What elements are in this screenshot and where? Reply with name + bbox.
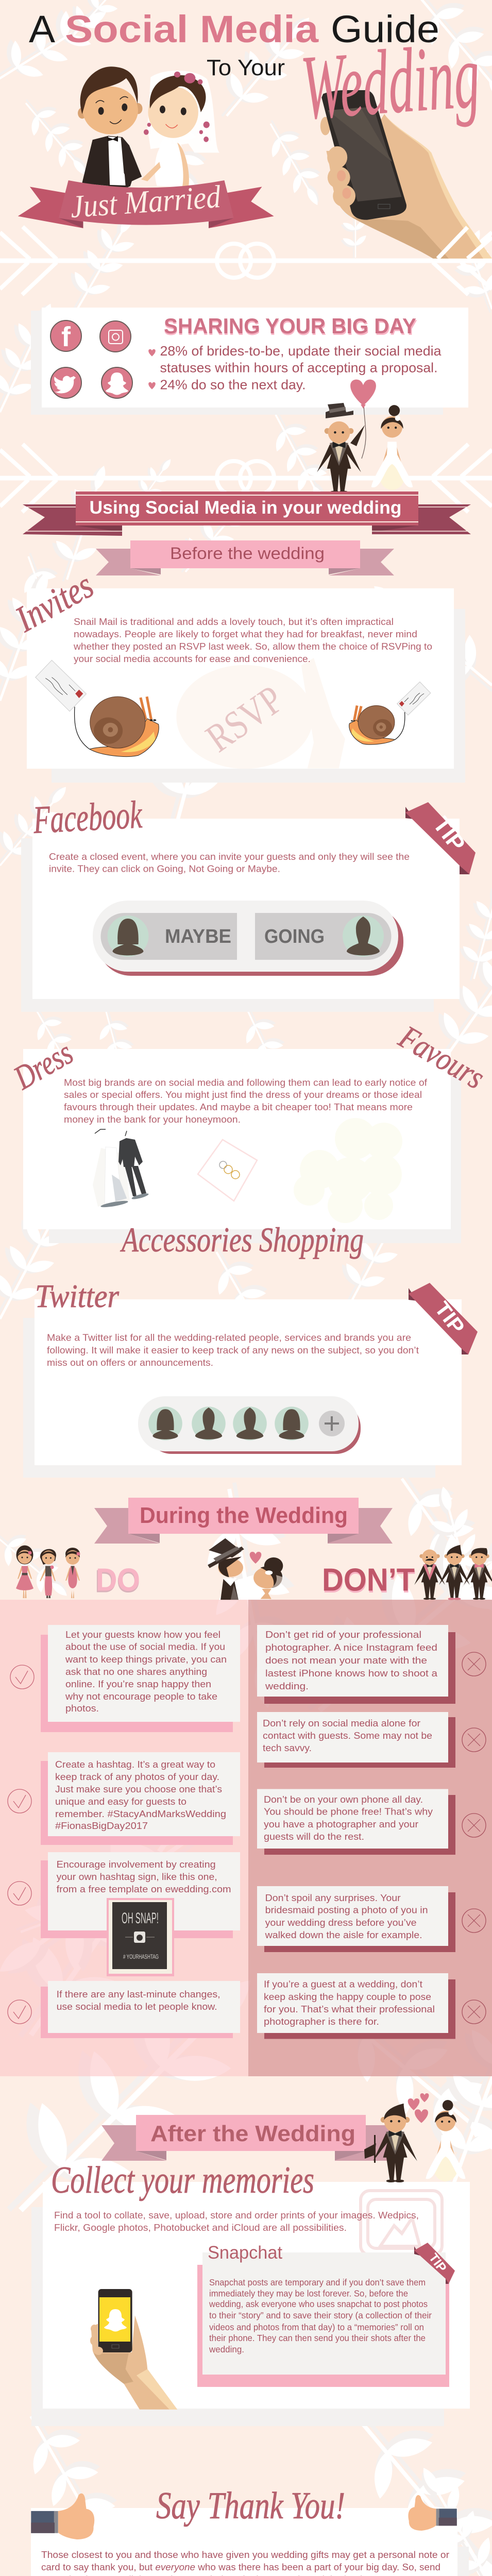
heading: Invites <box>8 564 100 640</box>
card: snapchat: immediately they may be lost forever. So, before the <box>209 2289 408 2299</box>
illustration: hand with snapchat phone <box>90 2289 177 2410</box>
title: Guide <box>331 8 439 50</box>
card: photographer: does not mean your mate with the <box>265 1655 427 1666</box>
text block: Most big brands are on social media and following them can lead to early notice of <box>64 1077 428 1088</box>
card: hashtag sign <box>8 1852 240 1976</box>
card: last-minute changes: If there are any last-minute changes, <box>57 1989 220 1999</box>
illustration: couple walking <box>364 2093 466 2182</box>
avatar: woman <box>107 916 148 957</box>
card: hashtag sign: from a free template on ewedding.com <box>57 1884 231 1894</box>
banner: after the wedding <box>101 2115 397 2161</box>
banner: before the wedding <box>96 540 394 575</box>
card: phone free: guests will do the rest. <box>264 1831 364 1842</box>
banner: using social media: Using Social Media in your wedding <box>90 498 402 518</box>
text block: money in the bank for your honeymoon. <box>64 1114 241 1125</box>
tip ribbon <box>414 2243 455 2284</box>
text block <box>73 616 432 664</box>
card: guests: why not encourage people to take <box>65 1691 217 1702</box>
illustration: kissing couple <box>208 1538 283 1600</box>
statistics list: statuses within hours of accepting a proposal. <box>160 360 438 375</box>
card: photographer <box>257 1625 486 1704</box>
card: hashtag: Just make sure you choose one that’s <box>55 1784 222 1794</box>
icon: facebook <box>50 320 81 352</box>
heading: SHARING YOUR BIG DAY <box>164 315 417 340</box>
panel: sharing your big day <box>31 308 468 415</box>
avatar list <box>138 1396 361 1454</box>
text block: your social media accounts for ease and convenience. <box>74 653 311 664</box>
card: phone free: You should be phone free! That’s why <box>264 1806 433 1817</box>
panel: do column <box>0 1600 248 2076</box>
card: guests: online. If you’re snap happy then <box>65 1679 211 1689</box>
text block <box>47 1332 419 1368</box>
card: tech savvy <box>257 1712 486 1768</box>
panel: facebook <box>21 793 476 1012</box>
heading: Facebook <box>32 793 143 842</box>
card: hashtag: remember. #StacyAndMarksWedding <box>55 1808 226 1819</box>
card: guests: Let your guests know how you feel <box>65 1629 220 1640</box>
card: surprises: Don’t spoil any surprises. Your <box>265 1892 401 1903</box>
text block: miss out on offers or announcements. <box>47 1357 213 1368</box>
illustration: bride and groom <box>78 66 219 195</box>
card: guests: ask that no one shares anything <box>65 1666 207 1677</box>
illustration: hand holding phone <box>320 90 492 259</box>
card: tech savvy: contact with guests. Some may not be <box>263 1730 432 1741</box>
icon: facebook: f <box>61 321 71 352</box>
card: snapchat: their phone. They can then send you their shots after the <box>209 2333 426 2343</box>
groomsman: pink shoes <box>439 1545 470 1600</box>
icon: snapchat <box>101 367 132 398</box>
card: guests <box>10 1625 240 1732</box>
card: surprises: walked down the aisle for example. <box>265 1929 422 1940</box>
text block: Flickr, Google photos, Photobucket and iCloud are all possibilities. <box>54 2222 347 2233</box>
groomsman: pink bow tie <box>464 1548 492 1600</box>
text block: Create a closed event, where you can invite your guests and only they will see the <box>49 851 410 862</box>
panel: twitter <box>23 1278 478 1478</box>
text block <box>41 2549 449 2576</box>
text block <box>54 2210 419 2233</box>
card: photographer: Don’t get rid of your professional <box>265 1629 421 1640</box>
banner: after the wedding: After the Wedding <box>150 2121 355 2146</box>
card: photographer: lastest iPhone knows how to shoot a <box>265 1668 438 1679</box>
card: hashtag <box>8 1752 240 1845</box>
heading: Say Thank You! <box>156 2485 345 2527</box>
banner: during the wedding <box>94 1498 393 1544</box>
card: last-minute changes <box>8 1981 240 2038</box>
card: surprises <box>257 1886 486 1952</box>
heading: Snapchat <box>208 2243 282 2263</box>
card: last-minute changes: use social media to let people know. <box>57 2001 217 2012</box>
text block <box>49 851 410 874</box>
ribbon: just married <box>18 179 274 228</box>
card: phone free: Don’t be on your own phone all day. <box>264 1794 423 1805</box>
card: photographer: wedding. <box>265 1681 309 1691</box>
card: guest posing: keep asking the happy couple to pose <box>264 1991 431 2002</box>
text block: Make a Twitter list for all the wedding-related people, services and brands you are <box>47 1332 411 1343</box>
icon: twitter <box>50 367 81 398</box>
card: guest posing: If you’re a guest at a wedding, don’t <box>264 1978 422 1990</box>
avatar: man <box>343 916 384 957</box>
groomsman: bald with moustache <box>414 1550 445 1600</box>
card: surprises: bridesmaid posting a photo of you in <box>265 1905 428 1916</box>
card: hashtag: keep track of any photos of your day. <box>55 1771 219 1782</box>
text block: sales or special offers. You might just find the dress of your dreams or those ideal <box>64 1089 422 1100</box>
watermark: photo icon <box>361 2191 442 2255</box>
text block: favours through their updates. And maybe a bit cheaper too! That means more <box>64 1101 413 1112</box>
statistics list: 24% do so the next day. <box>160 377 306 393</box>
heading: SHARING YOUR BIG DAY <box>164 314 416 338</box>
title: Social Media <box>65 8 319 50</box>
card: hashtag: unique and easy for guests to <box>55 1796 186 1807</box>
title: To Your <box>207 55 285 80</box>
card: snapchat: Snapchat posts are temporary and if you don’t save them <box>209 2277 426 2287</box>
icon: small snail with letter <box>349 682 431 744</box>
card: phone free: you have a photographer and your <box>264 1819 418 1829</box>
poster: oh snap: # YOURHASHTAG <box>123 1953 159 1960</box>
card: snapchat: wedding, ask everyone who uses snapchat to post photos <box>209 2299 428 2309</box>
statistics list <box>148 343 442 393</box>
icon: thumbs up left <box>31 2494 94 2539</box>
text block: whether they posted an RSVP last week. So, allow them the choice of RSVPing to <box>73 641 432 652</box>
card: hashtag: #FionasBigDay2017 <box>55 1820 148 1831</box>
poster: oh snap <box>107 1898 174 1976</box>
card: guest posing: photographer is there for. <box>264 2016 379 2027</box>
heading: Collect your memories <box>51 2159 314 2201</box>
heading: dress: Dress <box>7 1034 79 1097</box>
text block: invite. They can click on Going, Not Going or Maybe. <box>49 863 280 874</box>
heading: accessories shopping: Accessories Shopping <box>120 1220 364 1259</box>
card: guests: want to keep things private, you can <box>65 1654 227 1665</box>
heading: do: DO <box>96 1562 140 1598</box>
rsvp word: RSVP <box>198 676 291 760</box>
illustration: dress and suit <box>93 1129 149 1209</box>
card: snapchat <box>197 2243 455 2387</box>
title <box>29 8 439 80</box>
poster: oh snap: OH SNAP! <box>122 1910 159 1927</box>
card: guests: photos. <box>65 1703 99 1714</box>
card: surprises: your wedding dress before you’ve <box>265 1917 417 1928</box>
watermark snail <box>176 658 345 769</box>
panel: say thank you <box>31 2485 469 2576</box>
heading: Twitter <box>35 1278 120 1314</box>
tip ribbon <box>405 802 476 874</box>
banner: before the wedding: Before the wedding <box>170 544 325 563</box>
card: snapchat: videos and photos from that day) to a “memories” roll on <box>209 2322 424 2332</box>
icon: snail with letter <box>36 660 159 756</box>
panel: don't column <box>248 1600 492 2076</box>
icon: instagram <box>100 321 131 352</box>
text block <box>64 1077 428 1125</box>
illustration: groomsmen <box>414 1545 492 1600</box>
text block: Find a tool to collate, save, upload, store and order prints of your images. Wedpics, <box>54 2210 419 2221</box>
card: hashtag sign: Encourage involvement by creating <box>57 1859 216 1870</box>
statistics list: 28% of brides-to-be, update their social media <box>160 343 442 359</box>
panel: collect your memories <box>31 2093 470 2426</box>
heading: don't: DON’T <box>323 1564 415 1600</box>
illustration: couple with balloon <box>317 380 413 494</box>
illustration: bridesmaids <box>16 1546 80 1598</box>
tip ribbon: TIP <box>428 812 470 856</box>
title: A <box>29 8 56 50</box>
illustration: flowers <box>294 1118 402 1223</box>
card: guests: about the use of social media. If you <box>65 1641 225 1652</box>
text block: Snail Mail is traditional and adds a lovely touch, but it’s often impractical <box>74 616 394 627</box>
tip ribbon: TIP <box>430 1298 469 1338</box>
card: tech savvy: tech savvy. <box>263 1742 312 1753</box>
illustration: wedding rings <box>198 1140 257 1201</box>
card: phone free <box>257 1789 486 1855</box>
ribbon: just married: Just Married <box>69 179 222 225</box>
banner: using social media <box>23 492 471 536</box>
card: photographer: photographer. A nice Instagram feed <box>265 1642 437 1653</box>
toggle: maybe / going: GOING <box>264 926 325 947</box>
card: tech savvy: Don’t rely on social media alone for <box>263 1718 420 1728</box>
heading: do: DO <box>95 1564 140 1599</box>
tip ribbon: TIP <box>426 2251 449 2275</box>
card: guest posing: for you. That’s what their professional <box>264 2004 435 2014</box>
icon: add <box>319 1411 345 1436</box>
card: hashtag: Create a hashtag. It’s a great way to <box>55 1759 215 1770</box>
toggle: maybe / going <box>93 901 403 976</box>
card: snapchat: to their “story” and to save their story (a collection of their <box>209 2310 432 2320</box>
card: snapchat: wedding. <box>209 2344 244 2354</box>
panel: invites <box>8 564 465 783</box>
icon: thumbs up right <box>408 2495 457 2531</box>
text block: Those closest to you and those who have given you wedding gifts may get a personal note or <box>41 2549 449 2560</box>
text block: nowadays. People are likely to forget what they had for breakfast, never mind <box>74 629 417 639</box>
toggle: maybe / going: MAYBE <box>165 926 231 947</box>
card: guest posing <box>257 1973 486 2039</box>
card: hashtag sign: your own hashtag sign, like this one, <box>57 1871 217 1882</box>
banner: during the wedding: During the Wedding <box>140 1503 348 1528</box>
text block: card to say thank you, but everyone who was there has been a part of your big day. So, send <box>41 2562 440 2572</box>
text block: following. It will make it easier to keep track of any news on the subject, so you don’t <box>47 1345 419 1355</box>
panel: dress and favours <box>7 1018 491 1243</box>
heading: don't: DON’T <box>322 1562 415 1598</box>
tip ribbon <box>409 1283 478 1354</box>
